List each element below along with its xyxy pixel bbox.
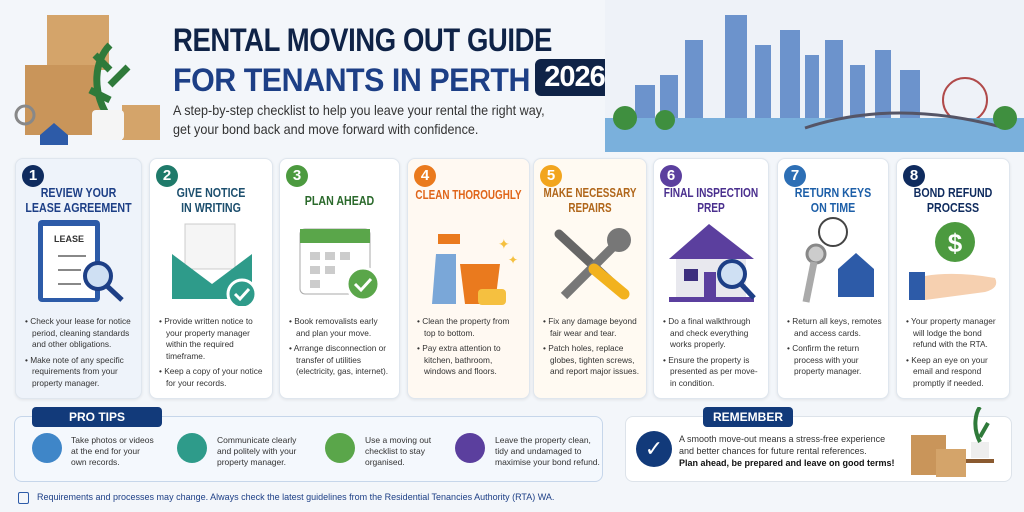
card 6: FINAL INSPECTION xyxy=(664,185,758,200)
tip: checklist xyxy=(325,433,432,467)
tip: leave clean: Leave the property clean, xyxy=(495,435,591,445)
card 3 xyxy=(279,158,400,399)
icon: check: ✓ xyxy=(645,436,663,461)
heading: pro tips: PRO TIPS xyxy=(69,410,125,424)
icon: house with magnifier xyxy=(669,224,756,302)
heading: remember xyxy=(703,407,793,427)
remember text xyxy=(679,434,895,468)
illustration: boxes and plant xyxy=(911,407,994,477)
icon: keys xyxy=(802,217,874,303)
card 5: MAKE NECESSARY xyxy=(544,185,636,200)
card 8: • Your property manager will lodge the bond refund with the RTA. xyxy=(906,316,996,349)
icon: envelope xyxy=(172,224,254,306)
card 4: • Pay extra attention to kitchen, bathroom, windows and floors. xyxy=(417,343,501,376)
card 1: REVIEW YOUR xyxy=(41,185,116,200)
card 1: • Make note of any specific requirements from your property manager. xyxy=(25,354,124,388)
tip: communicate: and politely with your xyxy=(217,446,296,456)
panel: pro tips xyxy=(14,416,603,482)
tip: leave clean: maximise your bond refund. xyxy=(495,457,600,467)
skyline illustration xyxy=(605,15,1024,152)
card 7: • Confirm the return process with your property manager. xyxy=(787,343,861,376)
icon: money in hand xyxy=(909,222,996,300)
icon: cleaning supplies: ✦ xyxy=(498,236,510,252)
card 7: ON TIME xyxy=(811,200,855,215)
card 5: REPAIRS xyxy=(568,200,612,215)
card 4: • Clean the property from top to bottom. xyxy=(417,316,509,338)
card 3: • Arrange disconnection or transfer of utilities (electricity, gas, internet). xyxy=(289,343,388,376)
card 7: RETURN KEYS xyxy=(795,185,871,200)
card 2: 2 xyxy=(163,167,171,184)
card 2: • Provide written notice to your property manager within the required timeframe. xyxy=(159,316,253,360)
card 8: 8 xyxy=(910,167,918,184)
tip: checklist: checklist to stay xyxy=(365,446,425,456)
card 3: 3 xyxy=(293,167,301,184)
card 6: • Do a final walkthrough and check everything works properly. xyxy=(663,316,750,349)
remember text: A smooth move-out means a stress-free experience xyxy=(679,434,885,444)
card 1: LEASE AGREEMENT xyxy=(25,200,132,215)
title xyxy=(173,22,605,98)
card 7: • Return all keys, remotes and access cards. xyxy=(787,316,882,338)
badge: 2026 xyxy=(535,59,614,96)
card 1: • Check your lease for notice period, cleaning standards and other obligations. xyxy=(25,316,131,349)
tip: photos: own records. xyxy=(71,457,120,467)
card 5: 5 xyxy=(547,167,555,184)
panel: remember xyxy=(625,416,1012,482)
card 2 xyxy=(149,158,273,399)
tip: leave clean xyxy=(455,433,600,467)
remember text: Plan ahead, be prepared and leave on good terms! xyxy=(679,458,895,468)
card 5 xyxy=(533,158,647,399)
tip: photos xyxy=(32,433,154,467)
card 7 xyxy=(777,158,889,399)
card 5: • Fix any damage beyond fair wear and tear. xyxy=(543,316,637,338)
tip: communicate xyxy=(177,433,296,467)
heading: remember: REMEMBER xyxy=(713,410,783,424)
icon: tools xyxy=(554,228,631,300)
icon: lease clipboard: LEASE xyxy=(54,234,84,244)
tip: communicate: Communicate clearly xyxy=(217,435,296,445)
tip: photos: Take photos or videos xyxy=(71,435,154,445)
card 4 xyxy=(407,158,530,399)
subtitle: A step-by-step checklist to help you leave your rental the right way, xyxy=(173,102,545,118)
icon: lease clipboard xyxy=(38,220,124,302)
subtitle: get your bond back and move forward with confidence. xyxy=(173,121,478,137)
card 6: PREP xyxy=(697,200,725,215)
heading: pro tips xyxy=(32,407,162,427)
card 4: CLEAN THOROUGHLY xyxy=(415,187,522,202)
card 8: • Keep an eye on your email and respond promptly if needed. xyxy=(906,354,988,388)
card 2: • Keep a copy of your notice for your records. xyxy=(159,366,262,388)
card 8: PROCESS xyxy=(927,200,979,215)
card 2: IN WRITING xyxy=(181,200,241,215)
icon: calendar xyxy=(300,228,378,298)
card 6 xyxy=(653,158,769,399)
tip: checklist: organised. xyxy=(365,457,405,467)
card 5: • Patch holes, replace globes, tighten screws, and report major issues. xyxy=(543,343,639,376)
remember text: and better chances for future rental references. xyxy=(679,446,867,456)
card 8: BOND REFUND xyxy=(914,185,992,200)
tip: communicate: property manager. xyxy=(217,457,286,467)
card 7: 7 xyxy=(791,167,799,184)
subtitle xyxy=(173,102,545,137)
icon: cleaning supplies xyxy=(432,234,518,305)
card 3: • Book removalists early and plan your move. xyxy=(289,316,378,338)
icon: check xyxy=(636,431,672,467)
tip: checklist: Use a moving out xyxy=(365,435,431,445)
card 4: 4 xyxy=(421,167,429,184)
icon: money in hand: $ xyxy=(948,228,963,258)
title: FOR TENANTS IN PERTH xyxy=(173,62,530,98)
card 2: GIVE NOTICE xyxy=(177,185,245,200)
card 8 xyxy=(896,158,1010,399)
card 1 xyxy=(15,158,142,399)
header illustration: boxes and plant xyxy=(14,15,160,145)
card 3: PLAN AHEAD xyxy=(305,193,374,208)
card 6: • Ensure the property is presented as per move-in condition. xyxy=(663,354,758,388)
badge: 2026: 2026 xyxy=(544,61,605,93)
tip: leave clean: tidy and undamaged to xyxy=(495,446,581,456)
card 6: 6 xyxy=(667,167,675,184)
icon: cleaning supplies: ✦ xyxy=(508,253,518,267)
card 1: 1 xyxy=(29,167,37,184)
tip: photos: at the end for your xyxy=(71,446,140,456)
footer note: Requirements and processes may change. Always check the latest guidelines from the Residential Tenancies Authority (RTA) WA. xyxy=(37,492,554,502)
title: RENTAL MOVING OUT GUIDE xyxy=(173,22,552,58)
